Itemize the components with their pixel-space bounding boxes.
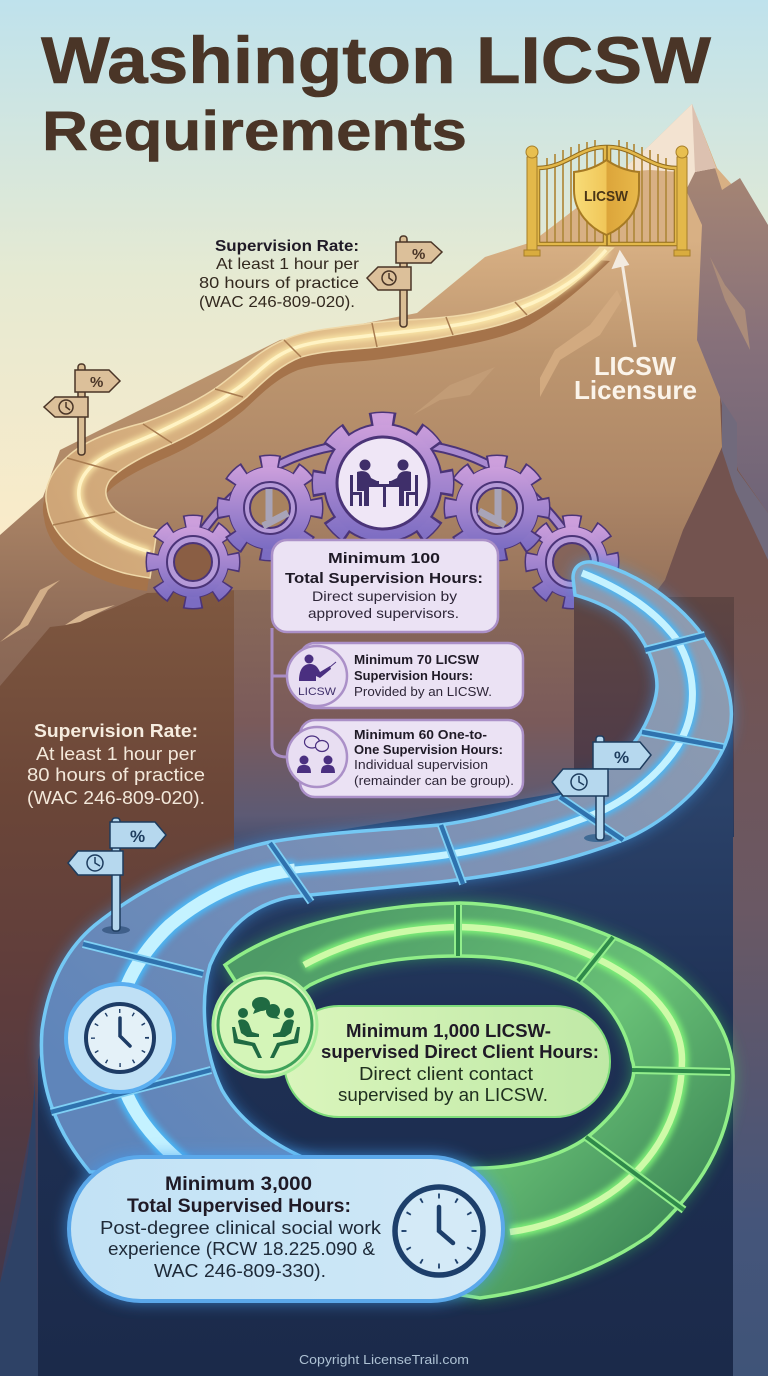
icon: two people talking: [287, 727, 347, 787]
panel: minimum 1,000 direct client hours: [284, 1006, 610, 1117]
panel: minimum 60 one-to-one hours: Individual supervision: [354, 758, 488, 772]
icon: blue signpost left: [68, 818, 166, 934]
supervision rate text, upper: Supervision Rate:: [215, 238, 359, 255]
panel: minimum 3,000 supervised hours: Total Supervised Hours:: [127, 1196, 351, 1217]
supervision rate text, left: Supervision Rate:: [34, 721, 198, 741]
icon: supervisor with pointer: LICSW: [298, 686, 337, 698]
panel: minimum 1,000 direct client hours: Direct client contact: [359, 1064, 533, 1084]
icon: counselling session: [213, 973, 317, 1077]
panel dark side behind blue road: [574, 597, 734, 837]
icon: blue signpost left: %: [130, 827, 145, 846]
sky background: [0, 0, 768, 560]
icon: golden gate with LICSW shield: LICSW: [584, 188, 629, 205]
panel: minimum 100 supervision hours: Total Supervision Hours:: [285, 570, 483, 587]
supervision rate text, left: (WAC 246-809-020).: [27, 788, 205, 808]
title: Washington LICSW: [41, 23, 712, 97]
supervision rate text, left: At least 1 hour per: [36, 744, 196, 764]
panel: minimum 70 LICSW hours: [287, 643, 523, 708]
green road: [225, 903, 733, 1298]
panel: minimum 3,000 supervised hours: [67, 1155, 505, 1302]
centre column background: [234, 590, 575, 855]
supervision rate text, upper: 80 hours of practice: [199, 275, 359, 292]
supervision rate text, left: 80 hours of practice: [27, 765, 205, 785]
panel: minimum 70 LICSW hours: Minimum 70 LICSW: [354, 653, 479, 667]
gear centre with meeting icon: [321, 421, 445, 545]
title: Requirements: [42, 99, 467, 162]
panel: minimum 1,000 direct client hours: supervised by an LICSW.: [338, 1085, 548, 1105]
panel: minimum 70 LICSW hours: Provided by an LICSW.: [354, 685, 492, 699]
gear left: [225, 463, 315, 553]
panel: minimum 60 one-to-one hours: One Supervision Hours:: [354, 743, 503, 757]
icon: large clock: [395, 1187, 483, 1275]
panel: minimum 1,000 direct client hours: supervised Direct Client Hours:: [321, 1042, 599, 1062]
licensure label: LICSW: [594, 351, 676, 381]
connecting arc: [200, 442, 567, 535]
gear far left: [154, 523, 232, 601]
icon: supervisor with pointer: [287, 646, 347, 706]
licensure label: [574, 351, 697, 405]
icon: upper signpost: %: [412, 246, 425, 263]
supervision rate text, upper: At least 1 hour per: [216, 256, 360, 273]
gear right: [452, 463, 542, 553]
licensure label: Licensure: [574, 375, 697, 405]
icon: blue signpost right: [552, 736, 651, 842]
panel: minimum 100 supervision hours: Direct supervision by: [312, 588, 457, 604]
supervision rate text, upper: [199, 238, 360, 311]
panel: minimum 100 supervision hours: [272, 540, 498, 757]
panel: minimum 3,000 supervised hours: experience (RCW 18.225.090 &: [108, 1239, 375, 1259]
icon: small clock on road: [66, 984, 174, 1092]
gear far right: [533, 523, 611, 601]
arrow to licensure: [614, 253, 635, 347]
icon: blue signpost right: %: [614, 748, 629, 767]
blue road: [41, 562, 731, 1172]
navy valley: [38, 730, 733, 1376]
panel: minimum 3,000 supervised hours: Post-degree clinical social work: [100, 1218, 382, 1238]
panel: minimum 60 one-to-one hours: Minimum 60 One-to-: [354, 728, 487, 742]
panel: minimum 3,000 supervised hours: Minimum 3,000: [165, 1174, 312, 1195]
icon: lower signpost: %: [90, 374, 103, 391]
title: [41, 23, 712, 162]
icon: lower signpost: [44, 364, 120, 455]
panel: minimum 100 supervision hours: Minimum 100: [328, 550, 440, 567]
panel: minimum 100 supervision hours: approved supervisors.: [308, 605, 459, 621]
panel: minimum 1,000 direct client hours: Minimum 1,000 LICSW-: [346, 1021, 551, 1041]
supervision rate text, upper: (WAC 246-809-020).: [199, 294, 355, 311]
panel: minimum 70 LICSW hours: Supervision Hours:: [354, 669, 473, 683]
supervision rate text, left: [27, 721, 205, 808]
icon: upper signpost: [367, 236, 442, 327]
panel: minimum 60 one-to-one hours: (remainder can be group).: [354, 774, 514, 788]
copyright: Copyright LicenseTrail.com: [299, 1352, 469, 1367]
icon: golden gate with LICSW shield: [524, 140, 690, 256]
gold road: [43, 247, 613, 591]
panel: minimum 3,000 supervised hours: WAC 246-809-330).: [154, 1261, 326, 1281]
panel: minimum 60 one-to-one hours: [287, 720, 523, 797]
